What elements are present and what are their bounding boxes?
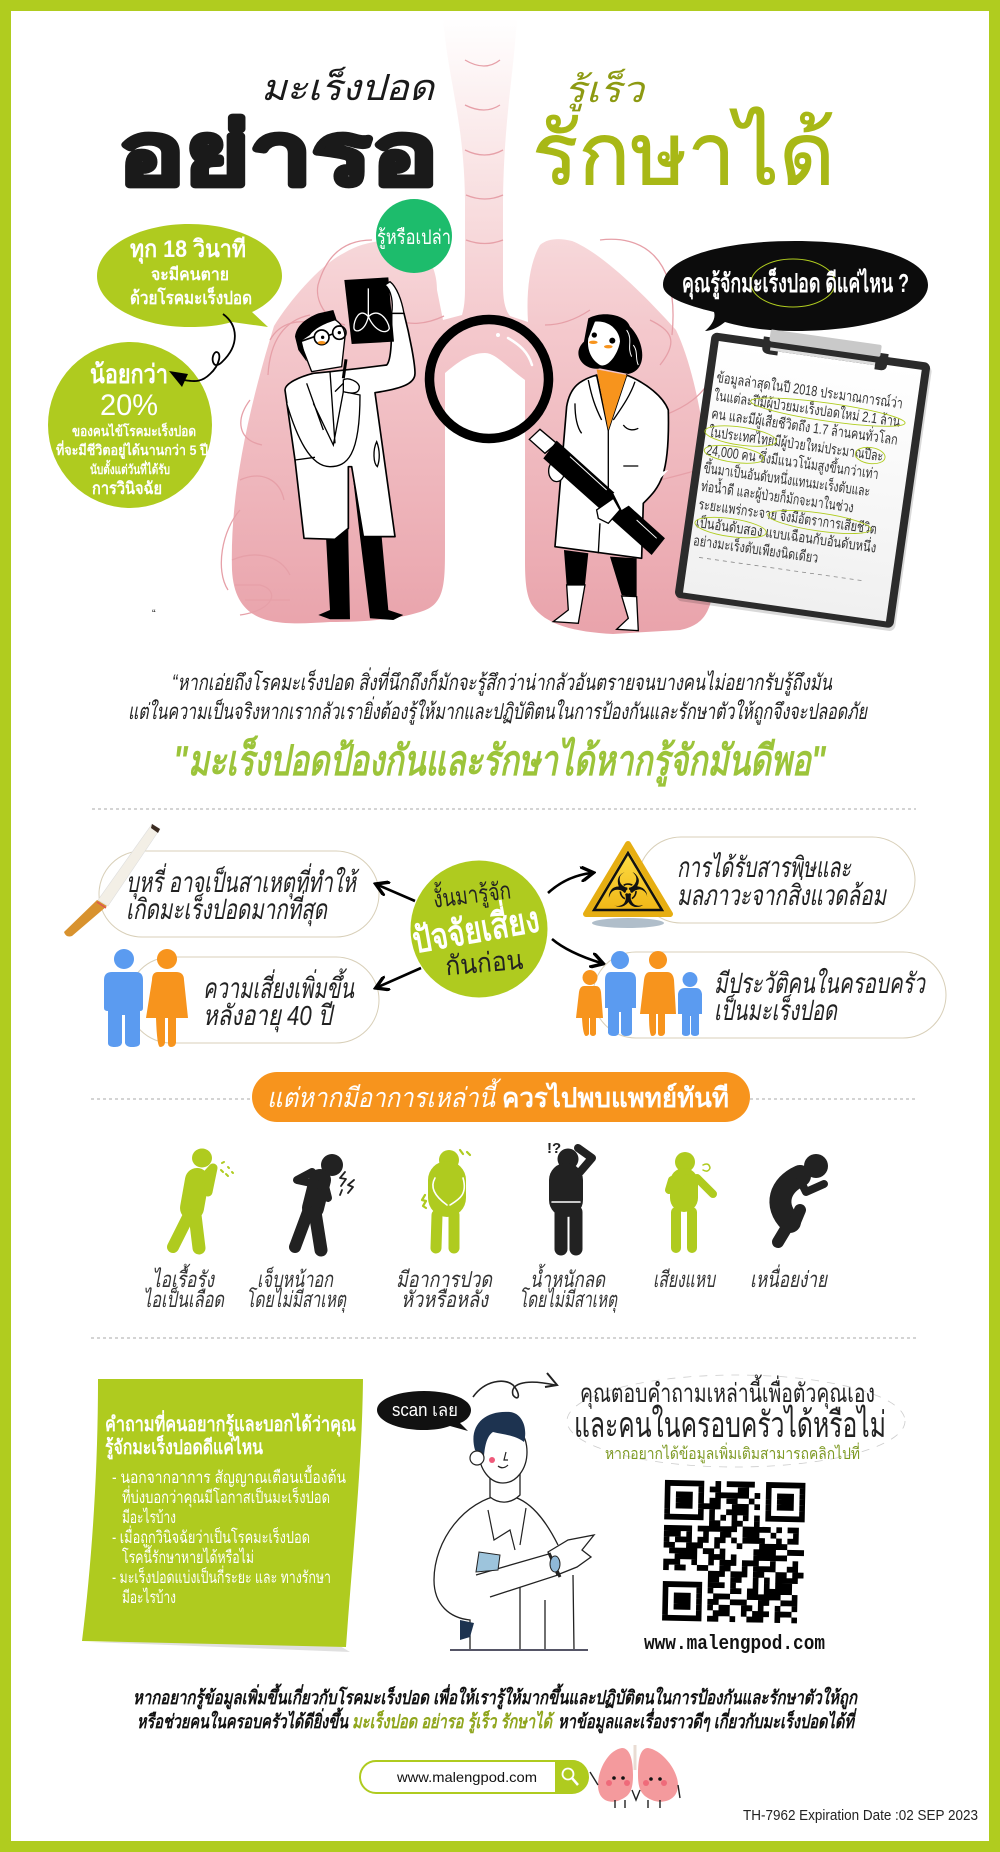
symptom labels xyxy=(143,1263,829,1313)
risk pill: pollution: มลภาวะจากสิ่งแวดล้อม xyxy=(677,876,887,911)
speech bubble: scan: scan เลย xyxy=(392,1400,458,1420)
illustration: female doctor with magnifier xyxy=(529,314,668,631)
symptoms divider and banner xyxy=(91,1072,916,1122)
stat circle: less than 20%: นับตั้งแต่วันที่ได้รับ xyxy=(90,459,170,477)
badge: รู้หรือเปล่า xyxy=(376,199,452,273)
approval code: TH-7962 Expiration Date :02 SEP 2023 xyxy=(743,1808,978,1824)
question heading with dashed oval xyxy=(567,1374,905,1467)
symptoms divider and banner: แต่หากมีอาการเหล่านี้ xyxy=(267,1078,501,1113)
title left xyxy=(118,66,438,203)
symptom labels: โดยไม่มีสาเหตุ xyxy=(246,1287,347,1313)
illustration: lungs and trachea xyxy=(221,18,714,634)
stat circle: less than 20%: การวินิจฉัย xyxy=(92,479,162,498)
center circle: risk factors: งั้นมารู้จัก xyxy=(431,872,513,915)
clipboard body text: เป็นอันดับสอง แบบเฉือนกับอันดับหนึ่ง xyxy=(695,512,878,557)
search bar: www.malengpod.com xyxy=(396,1769,537,1785)
stat circle: less than 20%: 20% xyxy=(100,389,158,422)
green note panel: questions xyxy=(82,1379,363,1652)
symptom labels: หัวหรือหลัง xyxy=(401,1287,490,1312)
symptom labels: เจ็บหน้าอก xyxy=(257,1266,334,1292)
green note panel: questions: - มะเร็งปอดแบ่งเป็นกี่ระยะ และ ทางรักษา xyxy=(112,1565,331,1587)
title big: รักษาได้: รักษาได้ xyxy=(532,107,835,203)
small quote mark: “ xyxy=(152,608,156,620)
risk pill: age: หลังอายุ 40 ปี xyxy=(203,1000,335,1033)
symptom icon: fatigue xyxy=(778,1154,828,1242)
clipboard body text: อย่างมะเร็งตับเพียงนิดเดียว xyxy=(692,530,820,567)
website under QR: www.malengpod.com xyxy=(644,1633,825,1656)
closing text: หาข้อมูลและเรื่องราวดีๆ เกี่ยวกับมะเร็งปอดได้ที่ xyxy=(558,1708,857,1734)
risk pill: smoking: เกิดมะเร็งปอดมากที่สุด xyxy=(126,890,328,927)
clipboard body text: คน และมีผู้เสียชีวิตถึง 1.7 ล้านคนทั่วโลก xyxy=(710,403,899,449)
icon: lung mascots xyxy=(590,1745,680,1808)
stat circle: less than 20%: ที่จะมีชีวิตอยู่ได้นานกว่า 5 ปี xyxy=(56,440,208,459)
closing text: หรือช่วยคนในครอบครัวได้ดียิ่งขึ้น xyxy=(137,1707,349,1733)
closing text: มะเร็งปอด อย่ารอ รู้เร็ว รักษาได้ xyxy=(352,1710,555,1734)
callout: every 18 seconds: ด้วยโรคมะเร็งปอด xyxy=(130,286,252,308)
symptom icon: cough xyxy=(173,1148,233,1248)
title line: รู้เร็ว: รู้เร็ว xyxy=(564,68,646,112)
green note panel: questions: - เมื่อถูกวินิจฉัยว่าเป็นโรคมะเร็งปอด xyxy=(112,1525,310,1548)
green note panel: questions: รู้จักมะเร็งปอดดีแค่ไหน xyxy=(105,1434,263,1461)
illustration: male doctor with x-ray xyxy=(285,277,415,620)
risk pill: pollution xyxy=(638,837,915,923)
callout: every 18 seconds: ทุก 18 วินาที xyxy=(130,236,246,265)
icon: cigarette xyxy=(64,824,160,936)
risk pill: smoking: บุหรี่ อาจเป็นสาเหตุที่ทำให้ xyxy=(126,863,360,900)
risk pill: age: ความเสี่ยงเพิ่มขึ้น xyxy=(203,968,355,1004)
symptom labels: เหนื่อยง่าย xyxy=(750,1264,829,1292)
green note panel: questions: โรคนี้รักษาหายได้หรือไม่ xyxy=(122,1545,254,1567)
green note panel: questions: - นอกจากอาการ สัญญาณเตือนเบื้องต้น xyxy=(112,1465,346,1487)
closing text xyxy=(133,1683,858,1734)
center circle: risk factors: กันก่อน xyxy=(444,945,524,981)
illustration: doctor pointing xyxy=(434,1412,594,1650)
black speech bubble xyxy=(663,241,928,331)
callout: every 18 seconds: จะมีคนตาย xyxy=(151,264,229,284)
symptom labels: ไอเรื้อรัง xyxy=(152,1263,216,1292)
clipboard body text: ระยะแพร่กระจาย จึงมีอัตราการเสียชีวิต xyxy=(697,496,878,538)
icon: family xyxy=(576,951,702,1036)
stat circle: less than 20%: น้อยกว่า xyxy=(90,359,168,389)
stat circle: less than 20%: ของคนไข้โรคมะเร็งปอด xyxy=(72,422,196,439)
clipboard with facts xyxy=(674,321,934,632)
icon: man and woman xyxy=(104,949,188,1047)
symptom icon: bone or back pain xyxy=(422,1150,470,1248)
symptom labels: มีอาการปวด xyxy=(396,1267,493,1292)
title right xyxy=(532,68,835,203)
stat circle: less than 20% xyxy=(48,342,212,508)
question heading with dashed oval: คุณตอบคำถามเหล่านี้เพื่อตัวคุณเอง xyxy=(580,1374,875,1409)
clipboard body text xyxy=(692,368,904,576)
center circle: risk factors: ปัจจัยเสี่ยง xyxy=(408,893,542,961)
badge: รู้หรือเปล่า: รู้หรือเปล่า xyxy=(377,227,451,250)
arrow: to question xyxy=(473,1373,557,1398)
risk pill: family history: มีประวัติคนในครอบครัว xyxy=(714,967,927,999)
green note panel: questions: มีอะไรบ้าง xyxy=(122,1507,176,1527)
question heading with dashed oval: หากอยากได้ข้อมูลเพิ่มเติมสามารถคลิกไปที่ xyxy=(605,1442,860,1464)
title line: มะเร็งปอด: มะเร็งปอด xyxy=(261,66,436,108)
risk pill: pollution: การได้รับสารพิษและ xyxy=(677,851,852,883)
green note panel: questions: ที่บ่งบอกว่าคุณมีโอกาสเป็นมะเร็งปอด xyxy=(122,1485,330,1508)
green note panel: questions: มีอะไรบ้าง xyxy=(122,1587,176,1607)
symptom icon: hoarse voice xyxy=(669,1152,713,1248)
magnifier lens ring xyxy=(430,320,548,438)
clipboard body text: 24,000 คน ซึ่งมีแนวโน้มสูงขึ้นกว่าเท่า xyxy=(705,439,880,483)
QR code xyxy=(662,1483,805,1621)
symptom icon: weight loss: !? xyxy=(547,1140,561,1157)
symptom icon: weight loss xyxy=(547,1140,592,1249)
symptom labels: โดยไม่มีสาเหตุ xyxy=(519,1287,618,1313)
symptom icon: chest pain xyxy=(295,1154,354,1250)
symptom labels: เสียงแหบ xyxy=(653,1267,716,1292)
icon: biohazard warning: ☣ xyxy=(606,863,650,919)
risk pill: family history xyxy=(593,952,946,1038)
title big: อย่ารอ: อย่ารอ xyxy=(118,107,438,203)
search bar xyxy=(360,1760,588,1793)
green note panel: questions: คำถามที่คนอยากรู้และบอกได้ว่าคุณ xyxy=(105,1409,356,1438)
icon: biohazard warning xyxy=(586,844,670,928)
clipboard body text: ในแต่ละปีมีผู้ป่วยมะเร็งปอดใหม่ 2.1 ล้าน xyxy=(713,385,902,431)
clipboard clip xyxy=(762,328,890,371)
intro quote xyxy=(128,667,869,725)
clipboard body text: ข้อมูลล่าสุดในปี 2018 ประมาณการณ์ว่า xyxy=(715,368,904,413)
clipboard body text: ขึ้นมาเป็นอันดับหนึ่งแทนมะเร็งตับและ xyxy=(703,457,872,500)
callout: every 18 seconds xyxy=(97,224,282,327)
center circle: risk factors xyxy=(408,860,548,998)
clipboard body text: ในประเทศไทยมีผู้ป่วยใหม่ประมาณปีละ xyxy=(708,423,884,465)
symptoms divider and banner: ควรไปพบแพทย์ทันที xyxy=(502,1082,729,1113)
risk pill: age xyxy=(128,957,379,1043)
arrows from center xyxy=(378,873,601,987)
clipboard body text: ท่อน้ำดี และผู้ป่วยก็มักจะมาในช่วง xyxy=(700,475,855,516)
symptom labels: น้ำหนักลด xyxy=(530,1263,606,1292)
speech bubble: scan xyxy=(377,1391,471,1431)
arrow: loop to stat circle xyxy=(169,314,235,387)
symptom labels: ไอเป็นเลือด xyxy=(143,1286,225,1312)
risk pill: smoking xyxy=(99,851,379,937)
risk pill: family history: เป็นมะเร็งปอด xyxy=(714,994,838,1026)
